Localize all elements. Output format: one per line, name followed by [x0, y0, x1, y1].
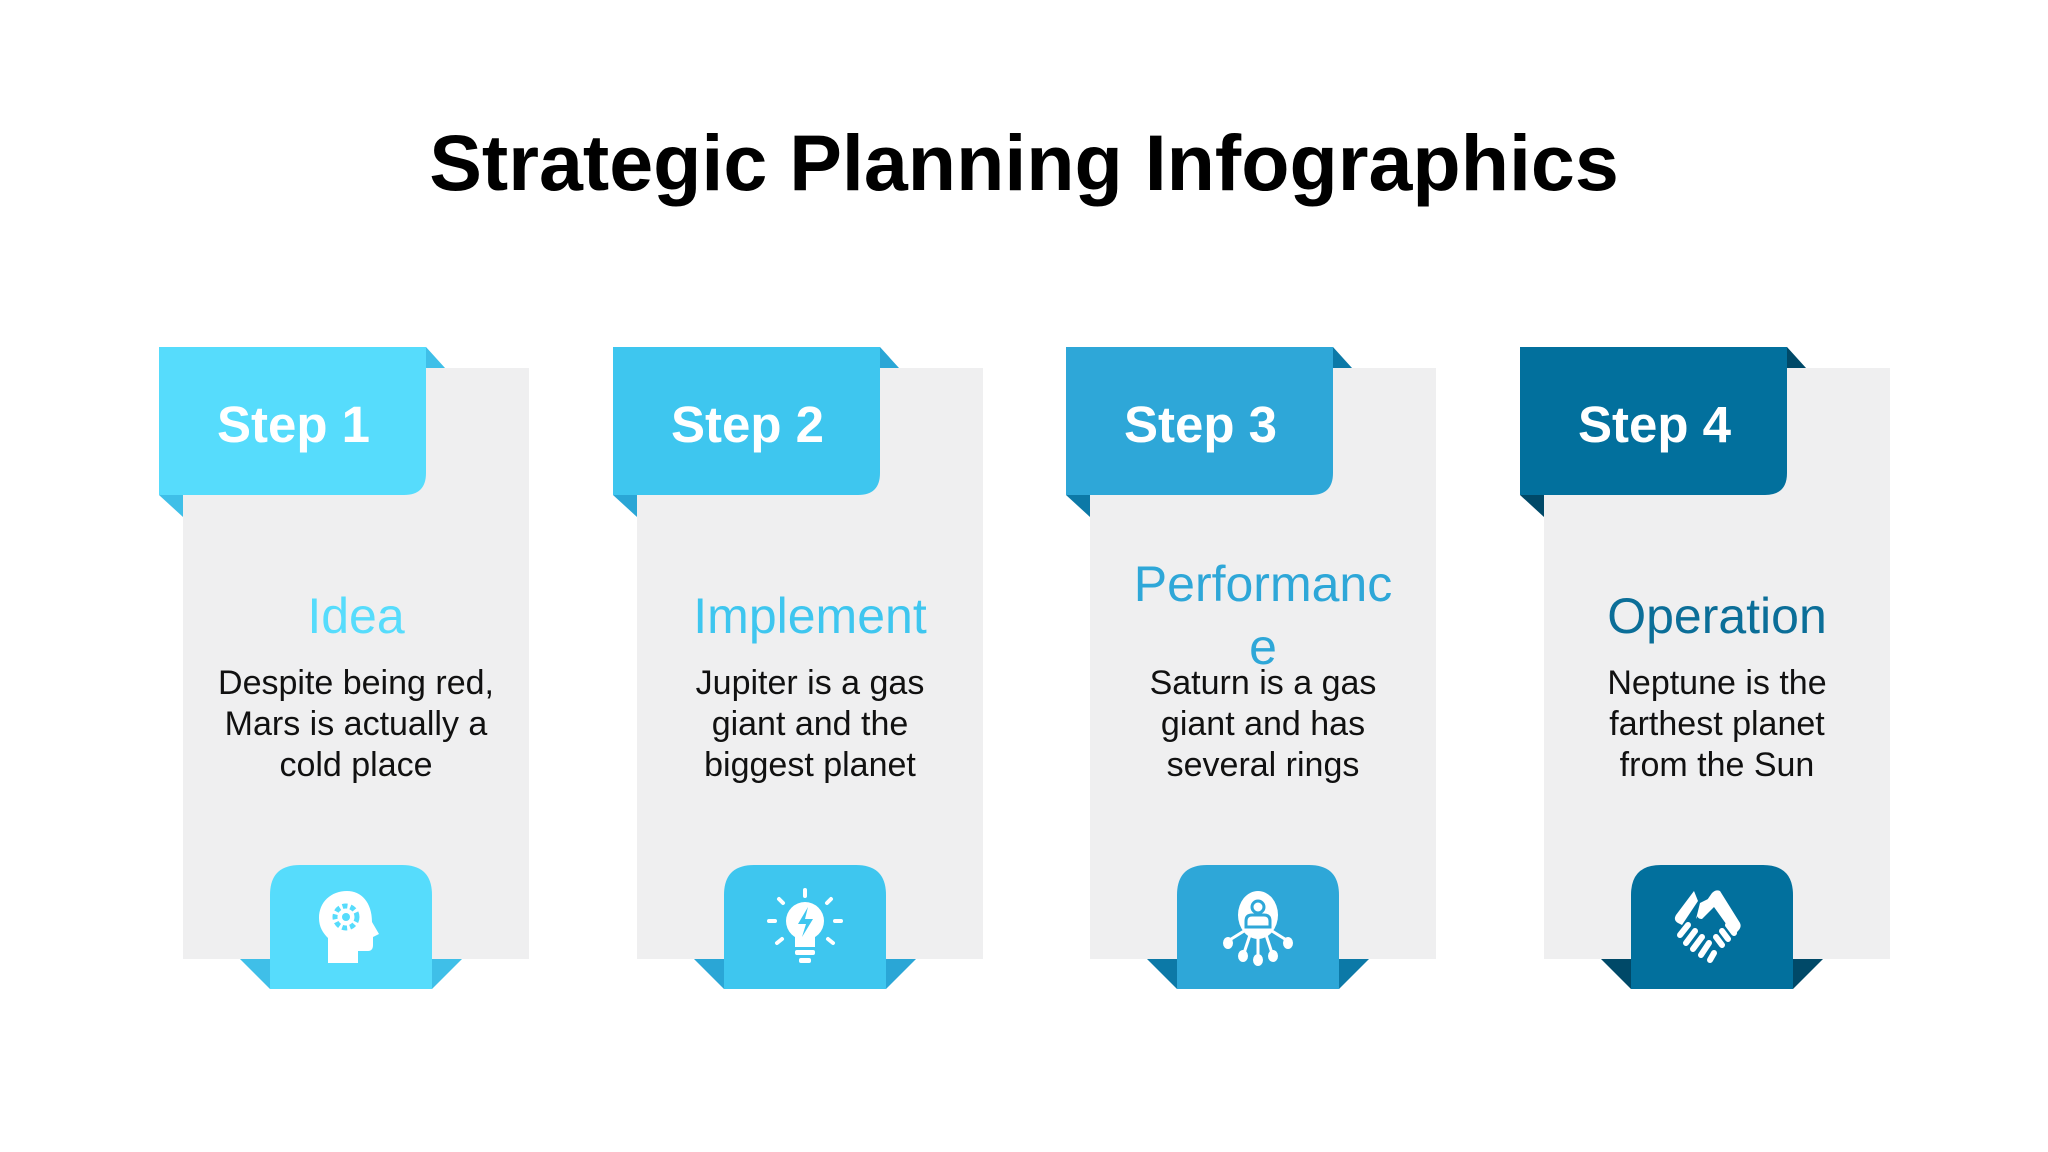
text block: Despite being red, Mars is actually a cold place	[218, 664, 494, 784]
icon: head with gear	[319, 891, 379, 963]
heading: Performance	[1134, 556, 1392, 675]
icon: handshake	[1674, 890, 1741, 963]
heading: Idea	[307, 588, 405, 644]
step label: Step 4	[1578, 396, 1731, 453]
step label: Step 1	[217, 396, 370, 453]
icon: light bulb	[767, 888, 843, 963]
title: Strategic Planning Infographics	[429, 118, 1619, 207]
step label: Step 3	[1124, 396, 1277, 453]
text block: Saturn is a gas giant and has several rings	[1150, 664, 1376, 784]
panel: step 4	[1520, 347, 1890, 989]
icon: network person	[1223, 891, 1293, 966]
text block: Neptune is the farthest planet from the Sun	[1607, 664, 1827, 784]
text block: Jupiter is a gas giant and the biggest planet	[696, 664, 924, 784]
step label: Step 2	[671, 396, 824, 453]
panel: step 1	[159, 347, 529, 989]
heading: Operation	[1607, 588, 1827, 644]
panel: step 3	[1066, 347, 1436, 989]
panel: step 2	[613, 347, 983, 989]
heading: Implement	[693, 588, 927, 644]
